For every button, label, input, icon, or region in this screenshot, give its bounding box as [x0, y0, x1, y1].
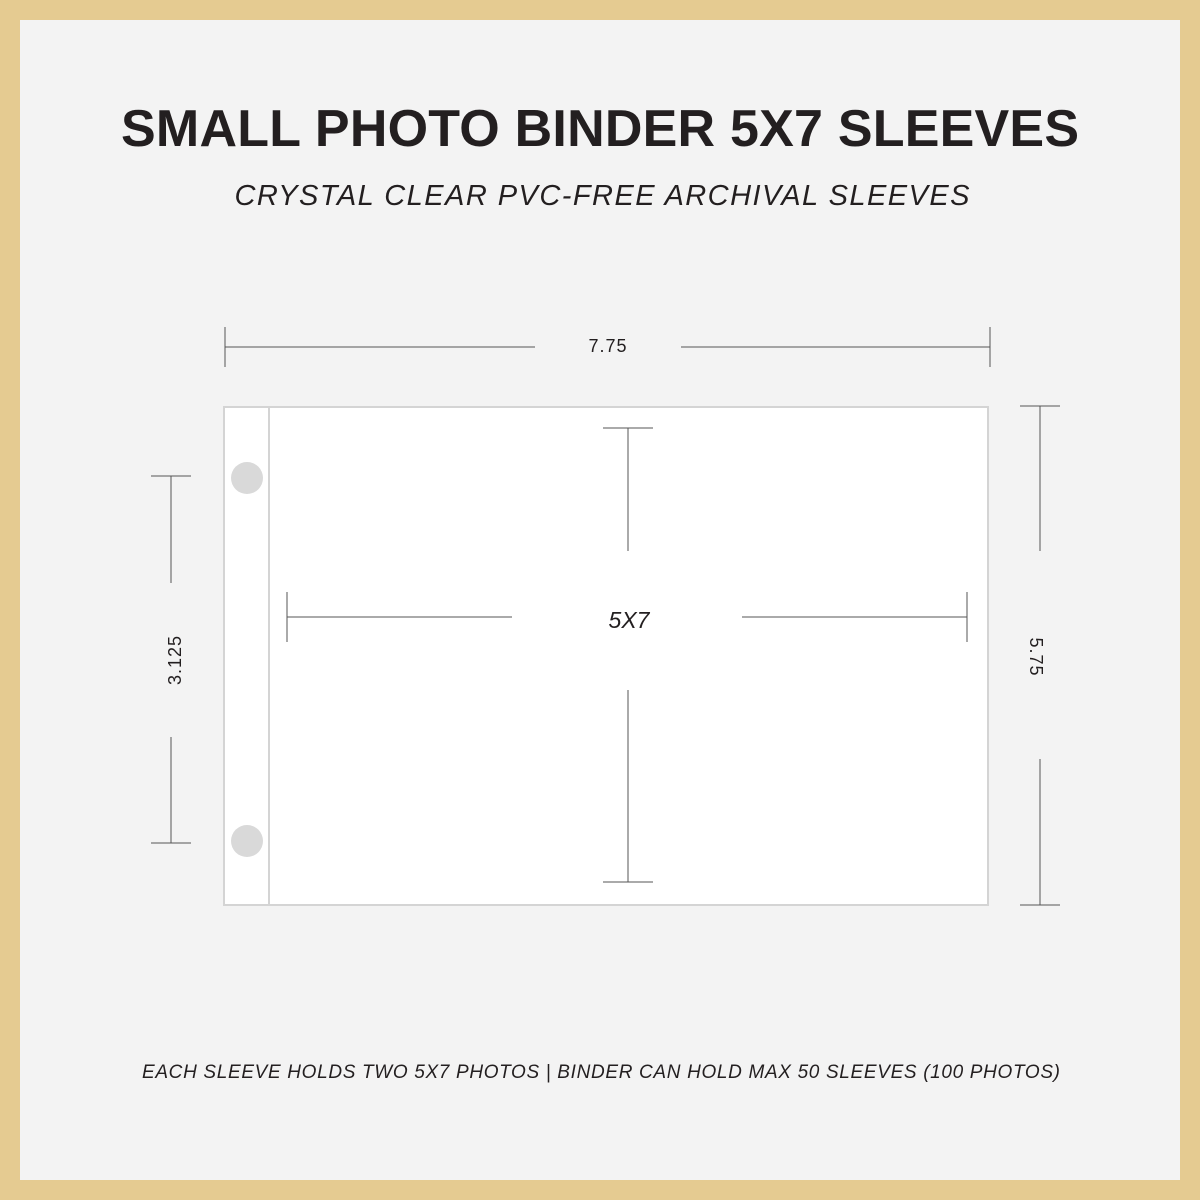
dimension: height 5.75: 5.75	[1026, 637, 1046, 677]
icon: punch hole bottom	[231, 825, 263, 857]
icon: punch hole top	[231, 462, 263, 494]
dimension: 5x7 photo area: 5X7	[609, 607, 651, 633]
binder strip	[268, 407, 270, 905]
subtitle: CRYSTAL CLEAR PVC-FREE ARCHIVAL SLEEVES	[234, 180, 970, 212]
dimension: width 7.75: 7.75	[588, 336, 628, 356]
sleeve	[224, 407, 988, 905]
title: SMALL PHOTO BINDER 5X7 SLEEVES	[121, 100, 1079, 158]
footer note: EACH SLEEVE HOLDS TWO 5X7 PHOTOS | BINDER CAN HOLD MAX 50 SLEEVES (100 PHOTOS)	[142, 1062, 1060, 1083]
dimension: hole spacing 3.125: 3.125	[165, 635, 185, 685]
